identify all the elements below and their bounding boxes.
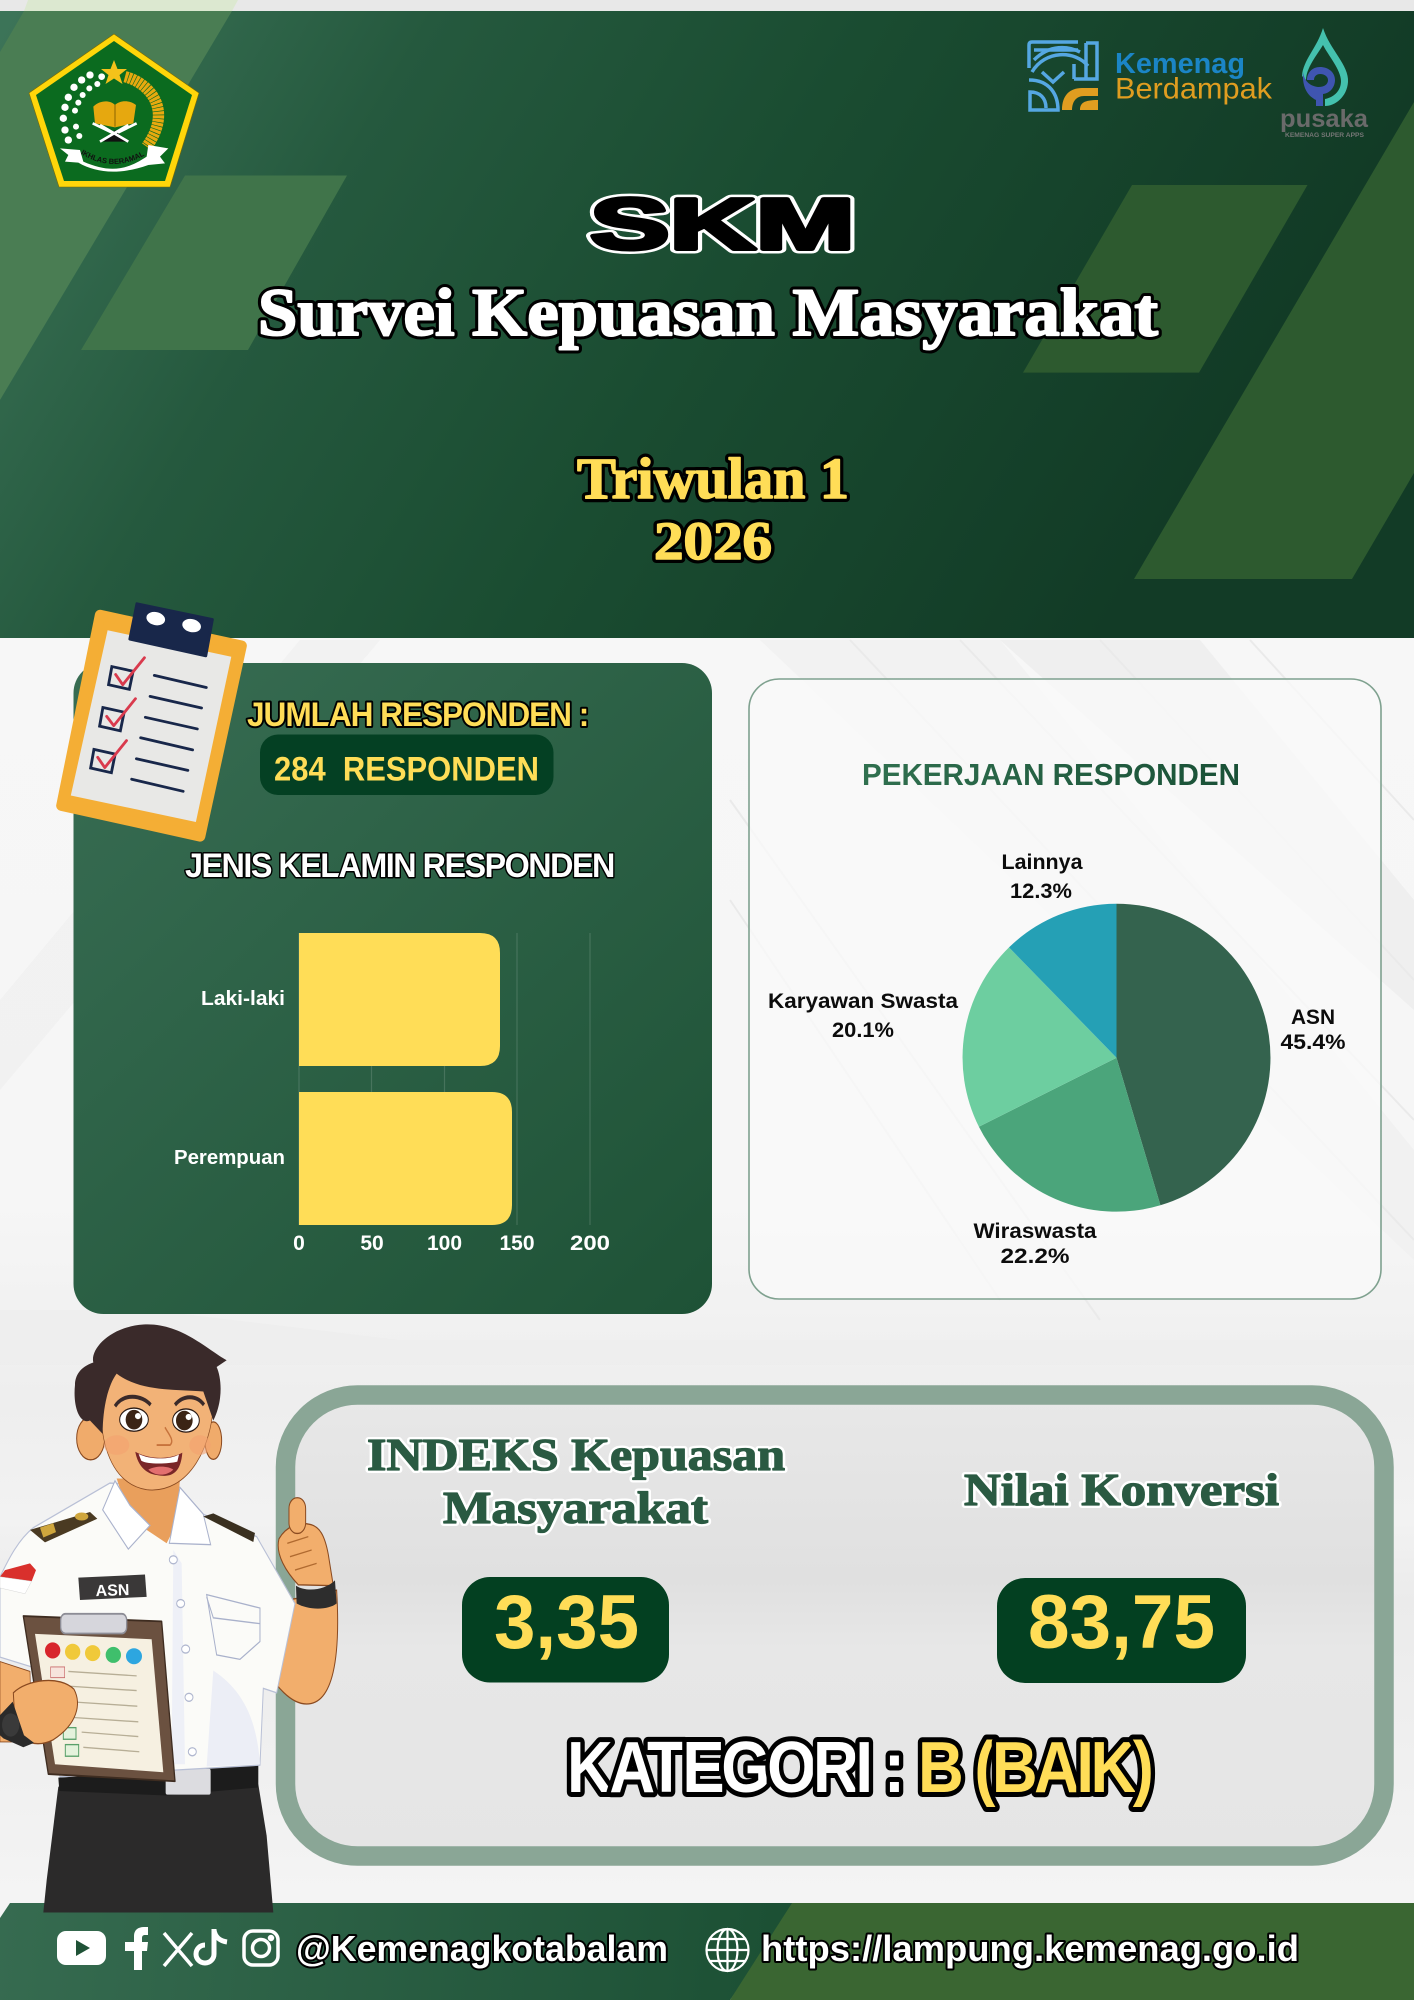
axis labels bbox=[293, 1232, 610, 1255]
icon: pusaka logo: KEMENAG SUPER APPS bbox=[1285, 132, 1365, 139]
category label: laki-laki: Laki-laki bbox=[201, 988, 285, 1010]
label: jumlah responden: JUMLAH RESPONDEN : bbox=[247, 695, 589, 733]
bar: perempuan bbox=[299, 1092, 512, 1225]
axis labels: 200 bbox=[570, 1232, 610, 1255]
icon: ministry emblem bbox=[28, 34, 200, 188]
value pill: 3,35: 3,35 bbox=[494, 1580, 639, 1665]
icon: facebook bbox=[125, 1927, 148, 1970]
icon: Kemenag Berdampak logo bbox=[1029, 42, 1098, 110]
pie label: lainnya: 12.3% bbox=[1010, 880, 1072, 903]
axis labels: 100 bbox=[427, 1232, 462, 1255]
pie label: karyawan swasta bbox=[768, 990, 958, 1042]
icon: instagram bbox=[244, 1931, 278, 1965]
title: Survei Kepuasan Masyarakat: Survei Kepuasan Masyarakat bbox=[258, 274, 1158, 350]
axis labels: 50 bbox=[360, 1232, 384, 1255]
title: SKM: SKM bbox=[590, 185, 855, 265]
footer text: website: https://lampung.kemenag.go.id bbox=[761, 1928, 1299, 1969]
icon: pusaka logo bbox=[1280, 28, 1369, 139]
panel: respondents bbox=[74, 663, 712, 1314]
bar: laki-laki bbox=[299, 933, 500, 1066]
panel: pekerjaan responden bbox=[749, 679, 1381, 1299]
subtitle: 2026: 2026 bbox=[654, 511, 772, 571]
axis labels: 0 bbox=[293, 1232, 305, 1255]
pie label: karyawan swasta: Karyawan Swasta bbox=[768, 990, 958, 1013]
pie label: ASN: ASN bbox=[1291, 1006, 1335, 1029]
pie label: wiraswasta: 22.2% bbox=[1000, 1245, 1070, 1268]
icon: globe bbox=[706, 1929, 748, 1971]
icon: X bbox=[164, 1933, 192, 1966]
category result: KATEGORI : bbox=[567, 1728, 905, 1808]
heading: nilai konversi: Nilai Konversi bbox=[964, 1464, 1279, 1515]
icon: ministry emblem: IKHLAS BERAMAL bbox=[81, 150, 144, 164]
value pill: 83,75: 83,75 bbox=[1028, 1580, 1215, 1665]
title: Survei Kepuasan Masyarakat: Survei Kepuasan Masyarakat bbox=[258, 274, 1158, 350]
heading: indeks kepuasan masyarakat: Masyarakat bbox=[443, 1482, 709, 1533]
axis labels: 150 bbox=[499, 1232, 535, 1255]
title: SKM: SKM bbox=[590, 185, 855, 265]
panel: index results bbox=[286, 1395, 1384, 1856]
subtitle: Triwulan 1: Triwulan 1 bbox=[577, 446, 849, 511]
pie label: ASN bbox=[1280, 1006, 1346, 1054]
logo text: Berdampak: Berdampak bbox=[1115, 72, 1273, 106]
subtitle: 2026: 2026 bbox=[654, 511, 772, 571]
title: SKM bbox=[590, 185, 855, 265]
category result bbox=[567, 1728, 1154, 1808]
illustration: ASN officer bbox=[0, 1324, 338, 1912]
heading: indeks kepuasan masyarakat: Masyarakat bbox=[443, 1482, 709, 1533]
pie chart: occupation bbox=[963, 904, 1270, 1212]
header banner bbox=[0, 11, 1414, 638]
bar chart: gender bbox=[174, 933, 610, 1255]
icon: checklist clipboard bbox=[61, 604, 242, 836]
value pill: 3,35 bbox=[462, 1577, 669, 1682]
value pill: 284 responden bbox=[260, 734, 554, 795]
category result: B (BAIK) bbox=[918, 1728, 1154, 1808]
illustration: ASN officer: ASN bbox=[95, 1582, 130, 1600]
value pill: 83,75 bbox=[997, 1578, 1246, 1683]
heading: nilai konversi: Nilai Konversi bbox=[964, 1464, 1279, 1515]
pie label: ASN: 45.4% bbox=[1280, 1031, 1346, 1054]
heading: indeks kepuasan masyarakat: INDEKS Kepuasan bbox=[367, 1429, 785, 1480]
heading: indeks kepuasan masyarakat bbox=[367, 1429, 785, 1533]
icon: youtube bbox=[57, 1931, 106, 1965]
footer text: social handle: @Kemenagkotabalam bbox=[296, 1928, 668, 1969]
pie label: karyawan swasta: 20.1% bbox=[832, 1019, 894, 1042]
logo text: Kemenag: Kemenag bbox=[1115, 48, 1245, 80]
icon: pusaka logo: pusaka bbox=[1280, 105, 1369, 133]
value pill: 284 responden: 284 RESPONDEN bbox=[274, 750, 539, 788]
pie label: lainnya: Lainnya bbox=[1002, 851, 1083, 874]
heading: indeks kepuasan masyarakat: INDEKS Kepuasan bbox=[367, 1429, 785, 1480]
pie label: wiraswasta bbox=[974, 1220, 1097, 1268]
pie label: lainnya bbox=[1002, 851, 1083, 903]
icon: tiktok bbox=[196, 1929, 227, 1963]
category label: perempuan: Perempuan bbox=[174, 1147, 285, 1169]
heading: pekerjaan responden: PEKERJAAN RESPONDEN bbox=[862, 757, 1240, 792]
subtitle: Triwulan 1: Triwulan 1 bbox=[577, 446, 849, 511]
footer bar bbox=[0, 1903, 1414, 2000]
heading: jenis kelamin responden: JENIS KELAMIN RESPONDEN bbox=[185, 847, 615, 885]
pie label: wiraswasta: Wiraswasta bbox=[974, 1220, 1097, 1243]
